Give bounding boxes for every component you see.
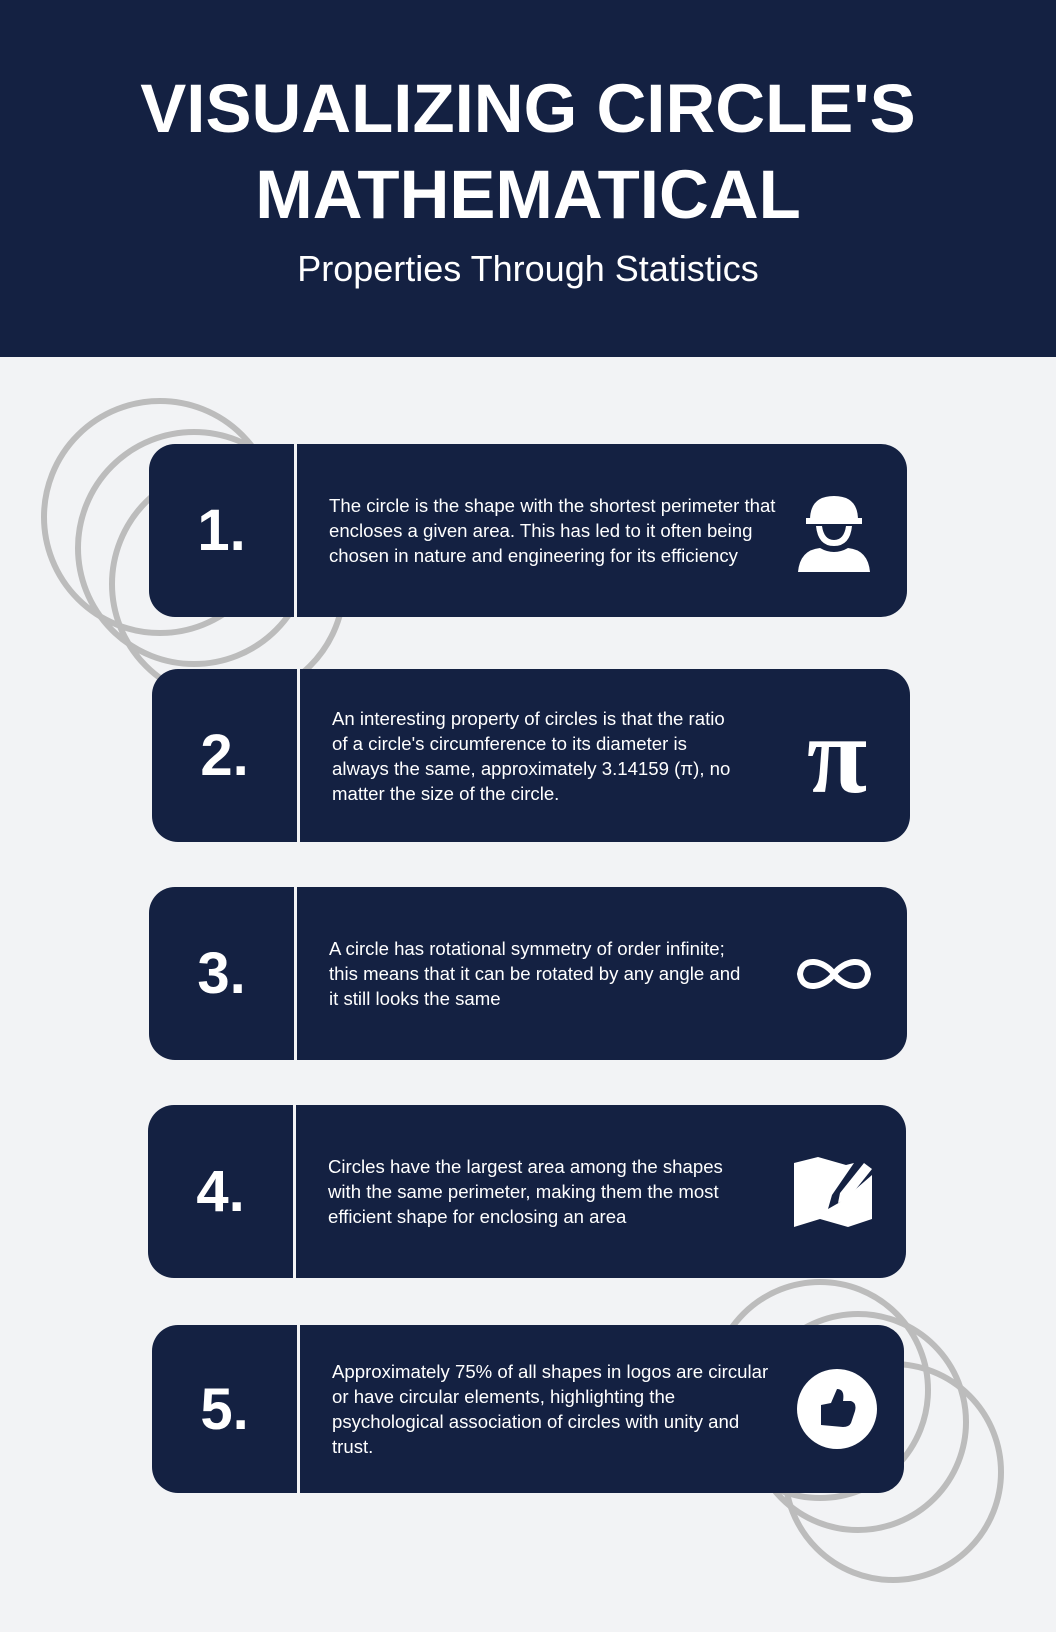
icon: pi: π: [807, 694, 867, 816]
card 2: [152, 669, 910, 842]
icon: map with pencil: [794, 1157, 872, 1227]
subtitle: Properties Through Statistics: [297, 248, 759, 289]
card 2: 2.: [200, 723, 249, 788]
header: [0, 0, 1056, 357]
card 4: [148, 1105, 906, 1278]
card 5: 5.: [200, 1376, 249, 1442]
card 1: The circle is the shape with the shortest perimeter that encloses a given area. This has led to it often being chosen in nature and engineering for its efficiency: [329, 495, 775, 566]
card 1: [149, 444, 907, 617]
card 1: 1.: [197, 498, 246, 563]
card 3: [149, 887, 907, 1060]
title: VISUALIZING CIRCLE'S: [140, 70, 916, 147]
title: MATHEMATICAL: [255, 156, 801, 233]
card 3: A circle has rotational symmetry of order infinite; this means that it can be rotated by any angle and it still looks the same: [329, 938, 740, 1009]
card 2: An interesting property of circles is that the ratio of a circle's circumference to its diameter is always the same, approximately 3.14159 (π), no matter the size of the circle.: [332, 708, 730, 804]
card 4: 4.: [196, 1159, 245, 1224]
card 4: Circles have the largest area among the shapes with the same perimeter, making them the most efficient shape for enclosing an area: [328, 1156, 723, 1227]
icon: infinity: [797, 959, 871, 989]
icon: worker: [798, 496, 870, 572]
icon: thumbs up circle: [797, 1369, 877, 1449]
card 3: 3.: [197, 941, 246, 1006]
card 5: Approximately 75% of all shapes in logos are circular or have circular elements, highlighting the psychological association of circles with unity and trust.: [332, 1361, 768, 1457]
title: [140, 70, 916, 233]
card 5: [152, 1325, 904, 1493]
